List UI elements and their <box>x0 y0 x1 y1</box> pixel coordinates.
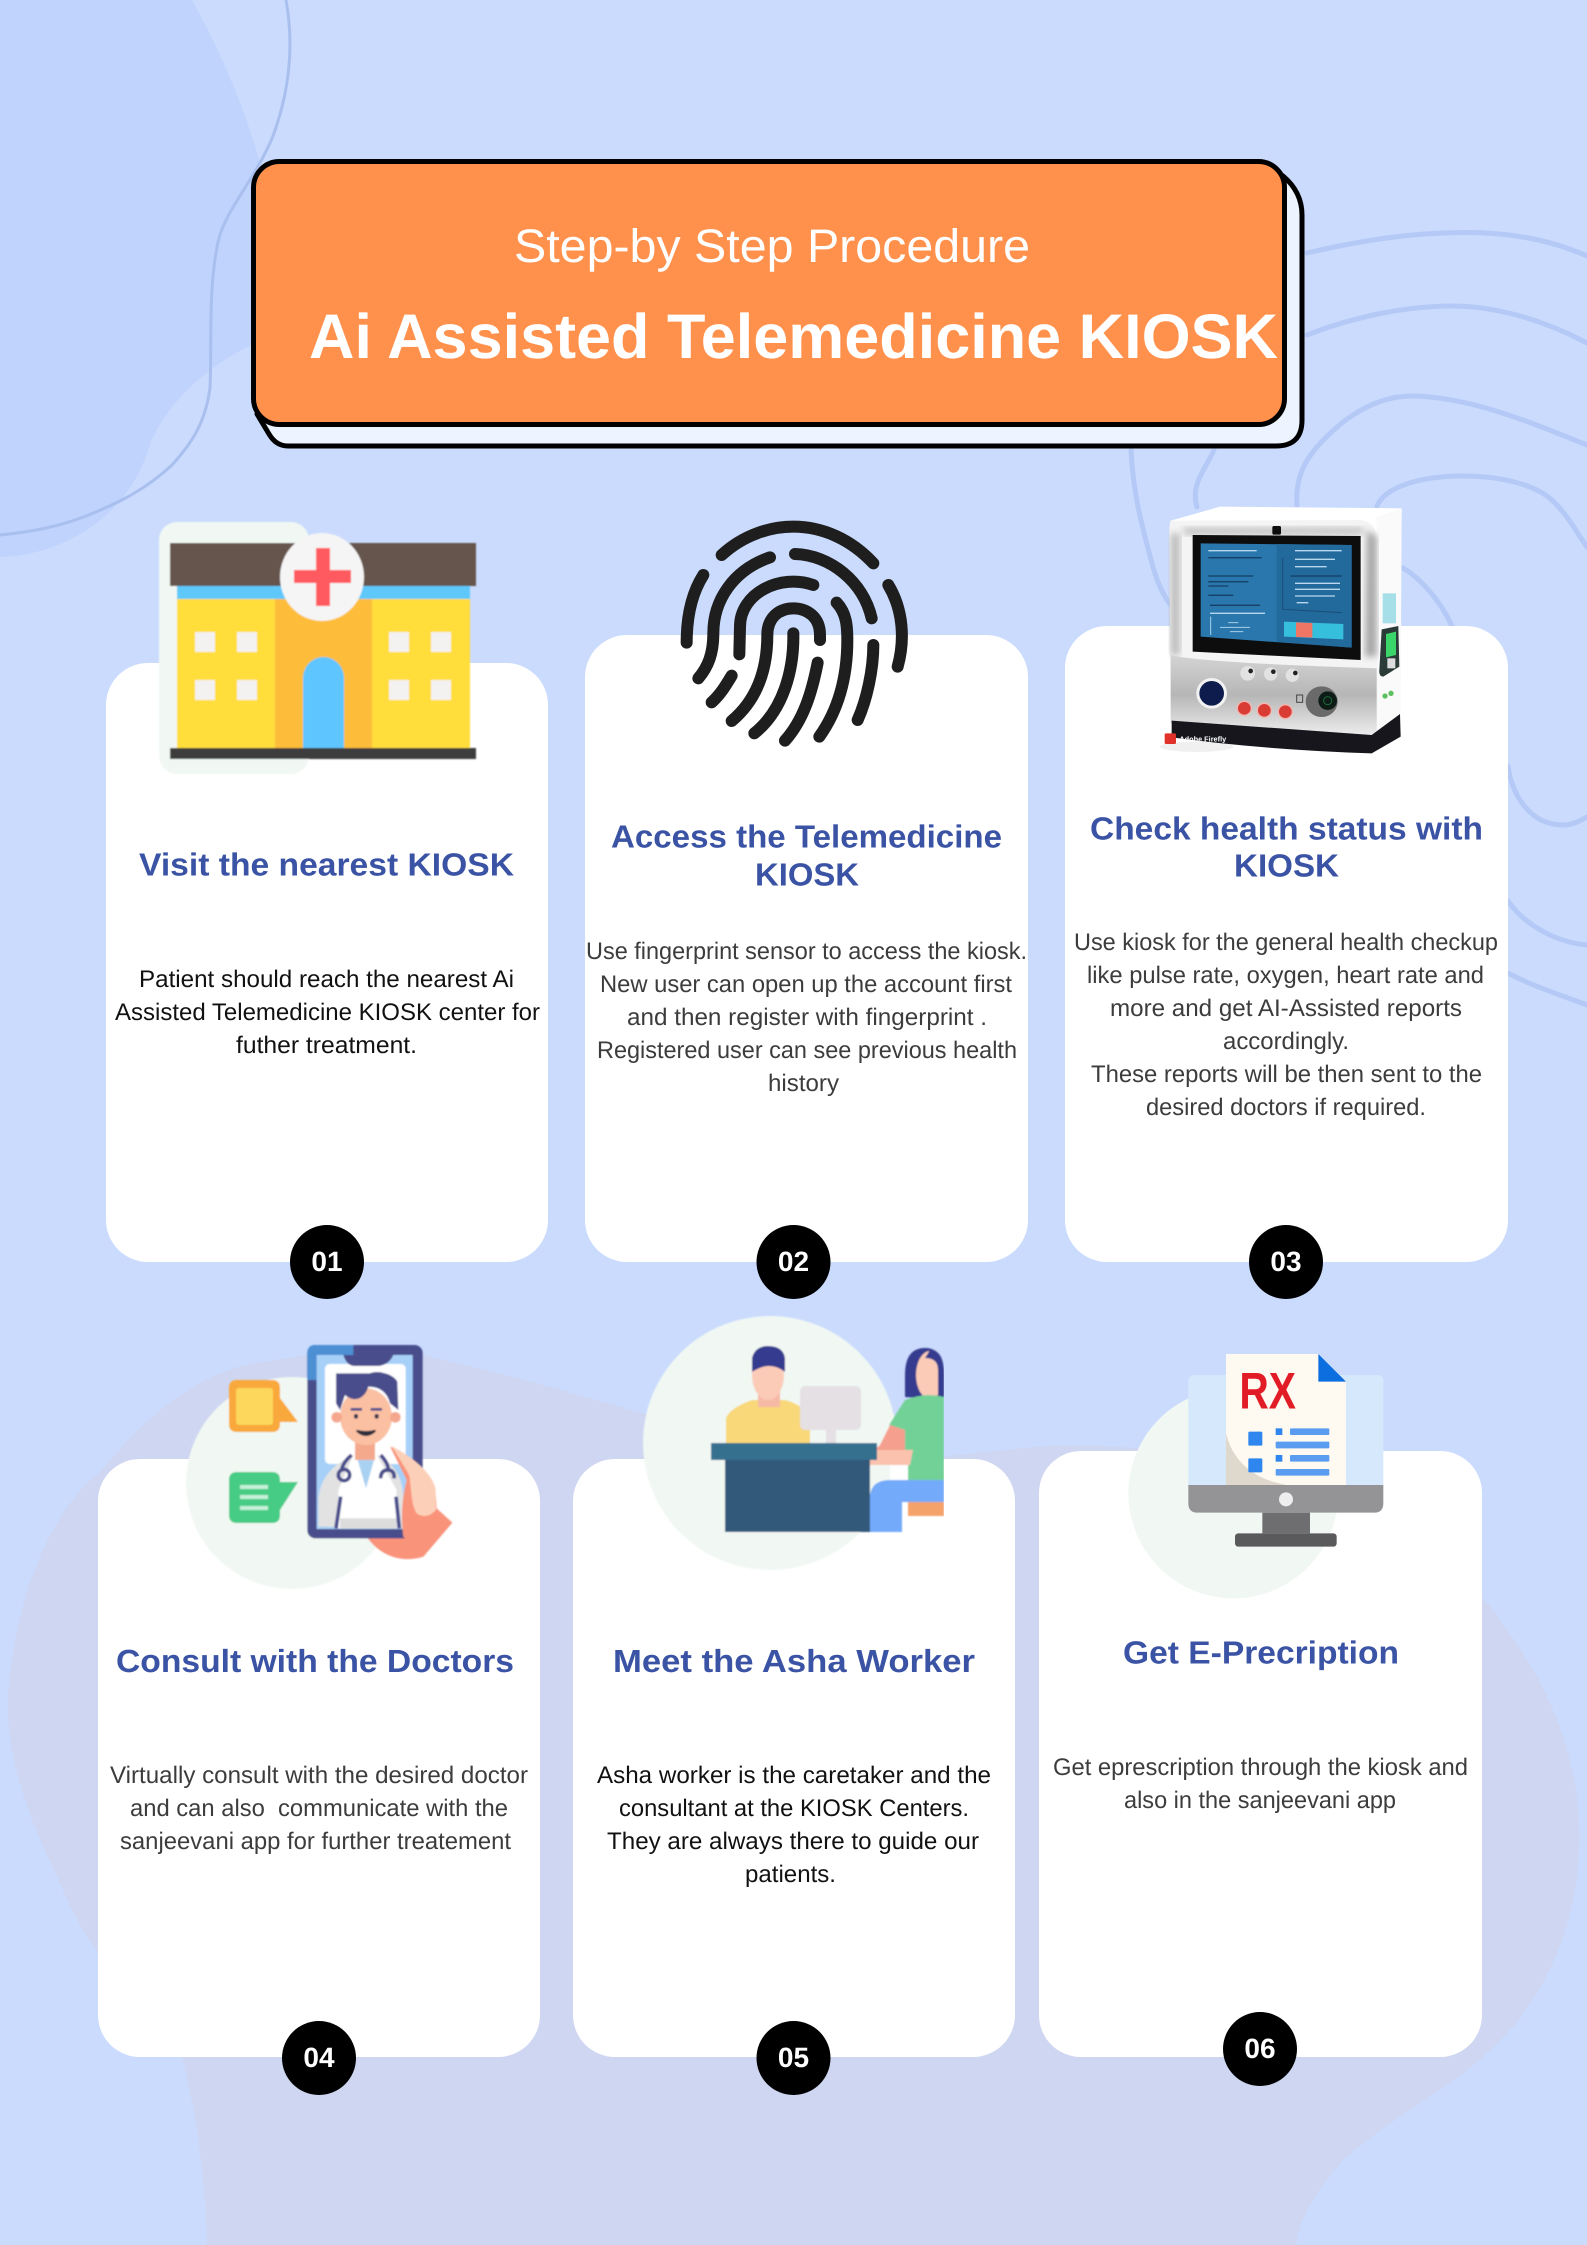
heading: KIOSK <box>755 856 859 892</box>
body text: Use kiosk for the general health checkup <box>1074 929 1498 956</box>
body text: history <box>768 1070 839 1097</box>
banner front plate <box>254 162 1284 424</box>
body text: sanjeevani app for further treatement <box>120 1828 511 1855</box>
card <box>1039 1451 1482 2057</box>
heading: Meet the Asha Worker <box>613 1643 975 1679</box>
icon: doctor on phone <box>186 1345 452 1589</box>
heading: KIOSK <box>1234 848 1339 884</box>
body text: patients. <box>745 1861 836 1888</box>
heading <box>1090 810 1483 884</box>
icon: e-prescription monitor <box>1128 1354 1383 1598</box>
body text: Patient should reach the nearest Ai <box>139 966 514 993</box>
panel: step 5 <box>573 1316 1015 2095</box>
body text <box>586 938 1027 1097</box>
heading: Check health status with <box>1090 810 1483 846</box>
body text: They are always there to guide our <box>607 1828 979 1855</box>
body text: Asha worker is the caretaker and the <box>597 1762 991 1789</box>
icon: hospital <box>158 522 478 774</box>
number badge 01 <box>290 1225 364 1299</box>
number badge 02 <box>756 1225 830 1299</box>
card <box>1065 626 1508 1262</box>
body text: New user can open up the account first <box>600 971 1012 998</box>
number badge 01: 01 <box>311 1246 343 1277</box>
body text: like pulse rate, oxygen, heart rate and <box>1087 962 1484 989</box>
body text: desired doctors if required. <box>1146 1094 1426 1121</box>
panel: step 3 <box>1065 507 1508 1299</box>
title: Ai Assisted Telemedicine KIOSK <box>309 302 1278 372</box>
body text <box>597 1762 991 1888</box>
heading: Access the Telemedicine <box>611 818 1002 854</box>
icon: fingerprint <box>687 527 902 741</box>
icon: asha worker at desk <box>643 1316 944 1570</box>
number badge 03 <box>1249 1225 1323 1299</box>
decorative wavy lines <box>0 0 1587 1005</box>
card <box>585 635 1028 1262</box>
heading: Visit the nearest KIOSK <box>139 846 514 882</box>
body text: Registered user can see previous health <box>597 1037 1017 1064</box>
card <box>573 1459 1015 2057</box>
body text: Assisted Telemedicine KIOSK center for <box>115 999 540 1026</box>
panel: step 2 <box>585 527 1028 1299</box>
body text: These reports will be then sent to the <box>1091 1061 1482 1088</box>
decorative blob: top left <box>0 0 262 557</box>
number badge 06: 06 <box>1244 2033 1276 2064</box>
subtitle: Step-by Step Procedure <box>514 219 1030 272</box>
banner back plate <box>257 165 1302 446</box>
body text: futher treatment. <box>236 1032 417 1059</box>
body text: also in the sanjeevani app <box>1124 1787 1396 1814</box>
body text: Virtually consult with the desired doctor <box>110 1762 528 1789</box>
body text: more and get AI-Assisted reports <box>1110 995 1462 1022</box>
number badge 03: 03 <box>1270 1246 1302 1277</box>
heading <box>611 818 1002 892</box>
body text: consultant at the KIOSK Centers. <box>619 1795 969 1822</box>
body text: Get eprescription through the kiosk and <box>1053 1754 1468 1781</box>
icon: kiosk machine: Adobe Firefly <box>1179 735 1226 743</box>
body text <box>1053 1754 1468 1814</box>
body text: and can also communicate with the <box>130 1795 508 1822</box>
number badge 05: 05 <box>778 2042 809 2073</box>
body text: and then register with fingerprint . <box>627 1004 987 1031</box>
number badge 02: 02 <box>778 1246 809 1277</box>
body text <box>115 966 540 1059</box>
heading: Get E-Precription <box>1123 1634 1399 1670</box>
number badge 04: 04 <box>303 2042 335 2073</box>
icon: e-prescription monitor: RX <box>1239 1362 1296 1420</box>
panel: step 6 <box>1039 1354 1482 2086</box>
number badge 04 <box>282 2021 356 2095</box>
panel: step 4 <box>98 1345 540 2095</box>
body text <box>1074 929 1498 1121</box>
icon: kiosk machine <box>1160 507 1402 753</box>
body text <box>110 1762 528 1855</box>
number badge 06 <box>1223 2012 1297 2086</box>
number badge 05 <box>756 2021 830 2095</box>
body text: accordingly. <box>1223 1028 1349 1055</box>
panel: step 1 <box>106 522 548 1299</box>
body text: Use fingerprint sensor to access the kiosk. <box>586 938 1027 965</box>
card <box>106 663 548 1262</box>
title banner <box>254 162 1302 446</box>
decorative blob: bottom <box>8 1350 1579 2245</box>
card <box>98 1459 540 2057</box>
heading: Consult with the Doctors <box>116 1643 514 1679</box>
